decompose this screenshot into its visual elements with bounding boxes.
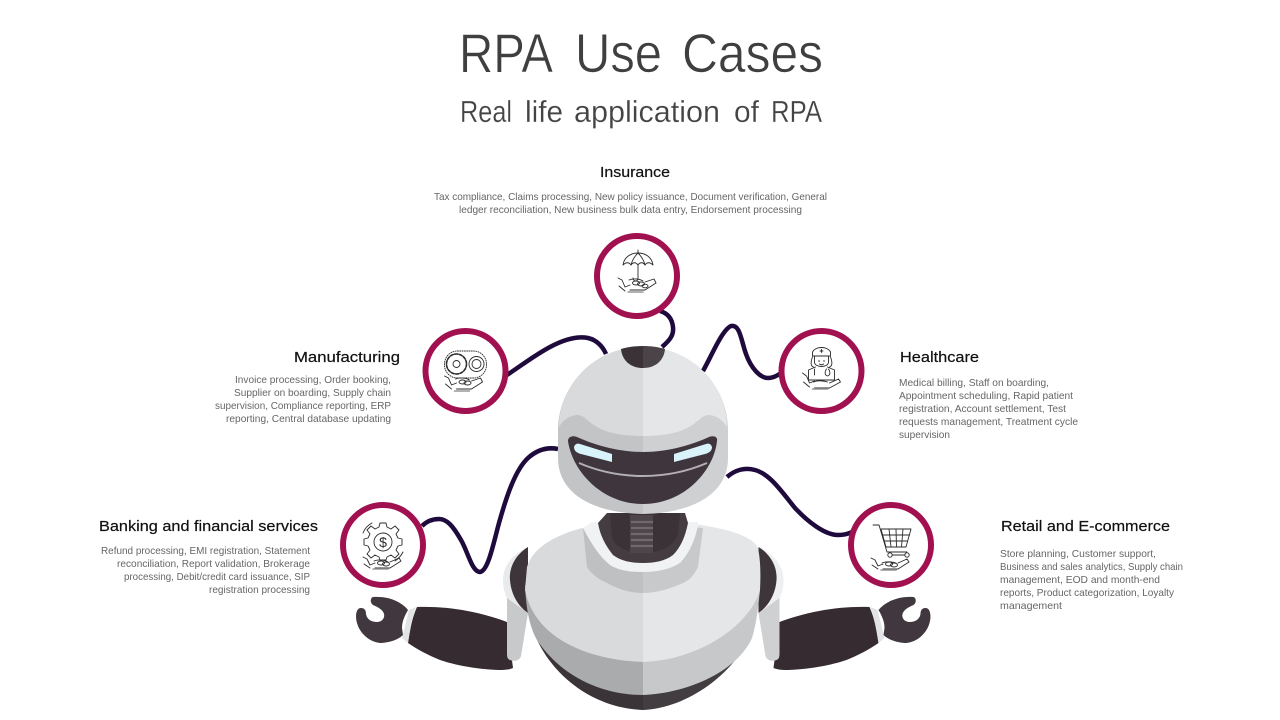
title: RPA <box>459 22 553 84</box>
description: insurance: Tax compliance, Claims processing, New policy issuance, Document verification, General <box>434 191 827 203</box>
description: banking: processing, Debit/credit card issuance, SIP <box>124 571 310 583</box>
description: retail: Business and sales analytics, Supply chain <box>1000 561 1183 573</box>
panel: healthcare <box>782 331 1078 441</box>
description: manufacturing: Supplier on boarding, Supply chain <box>234 387 391 399</box>
connector cables <box>422 311 852 572</box>
subtitle: life <box>525 94 563 129</box>
description: manufacturing: reporting, Central database updating <box>226 413 391 425</box>
description: healthcare <box>899 377 1078 441</box>
description: healthcare: Medical billing, Staff on boarding, <box>899 377 1049 389</box>
description: banking <box>101 545 310 596</box>
description: healthcare: supervision <box>899 429 950 441</box>
icon: dollar gear over hand <box>343 505 423 585</box>
robot illustration <box>356 346 930 710</box>
title: Cases <box>682 22 823 84</box>
robot visor <box>568 436 717 504</box>
icon: doctor over hand <box>782 331 862 411</box>
robot left arm <box>356 547 528 670</box>
robot head <box>558 346 728 514</box>
heading: manufacturing: Manufacturing <box>294 349 400 366</box>
description: banking: Refund processing, EMI registration, Statement <box>101 545 310 557</box>
subtitle: Real <box>460 94 512 129</box>
robot neck <box>598 513 688 563</box>
heading: healthcare: Healthcare <box>900 349 979 366</box>
description: healthcare: Appointment scheduling, Rapid patient <box>899 390 1073 402</box>
description: retail: Store planning, Customer support, <box>1000 548 1156 560</box>
subtitle: application <box>574 94 720 129</box>
description: retail: management, EOD and month-end <box>1000 574 1160 586</box>
subtitle <box>460 94 822 129</box>
title: Use <box>575 22 662 84</box>
icon: umbrella over hand <box>597 236 677 316</box>
subtitle: of <box>734 94 759 129</box>
heading: retail: Retail and E-commerce <box>1001 518 1170 535</box>
robot collar <box>583 525 643 593</box>
panel: banking and financial services <box>99 505 423 596</box>
robot head cap <box>621 346 643 368</box>
heading: insurance: Insurance <box>600 164 670 181</box>
panel: manufacturing <box>215 331 506 425</box>
description: banking: registration processing <box>209 584 310 596</box>
description: insurance: ledger reconciliation, New business bulk data entry, Endorsement processing <box>459 204 802 216</box>
title <box>459 22 823 84</box>
description: healthcare: registration, Account settlement, Test <box>899 403 1066 415</box>
description: manufacturing: Invoice processing, Order booking, <box>235 374 391 386</box>
subtitle: RPA <box>771 94 822 129</box>
description: banking: reconciliation, Report validation, Brokerage <box>117 558 310 570</box>
panel: retail and e-commerce <box>851 505 1183 612</box>
description: manufacturing: supervision, Compliance reporting, ERP <box>215 400 391 412</box>
icon: gears over hand <box>426 331 506 411</box>
robot torso <box>525 513 760 710</box>
robot right arm <box>758 547 930 670</box>
description: retail: reports, Product categorization, Loyalty <box>1000 587 1175 599</box>
heading: banking: Banking and financial services <box>99 518 318 535</box>
description: manufacturing <box>215 374 391 425</box>
description: insurance <box>434 191 827 216</box>
panel: insurance <box>434 164 827 316</box>
icon: dollar gear over hand: $ <box>379 534 387 550</box>
description: retail <box>1000 548 1183 612</box>
icon: shopping cart over hand <box>851 505 931 585</box>
robot eyes <box>574 444 612 462</box>
description: healthcare: requests management, Treatment cycle <box>899 416 1078 428</box>
description: retail: management <box>1000 600 1062 612</box>
